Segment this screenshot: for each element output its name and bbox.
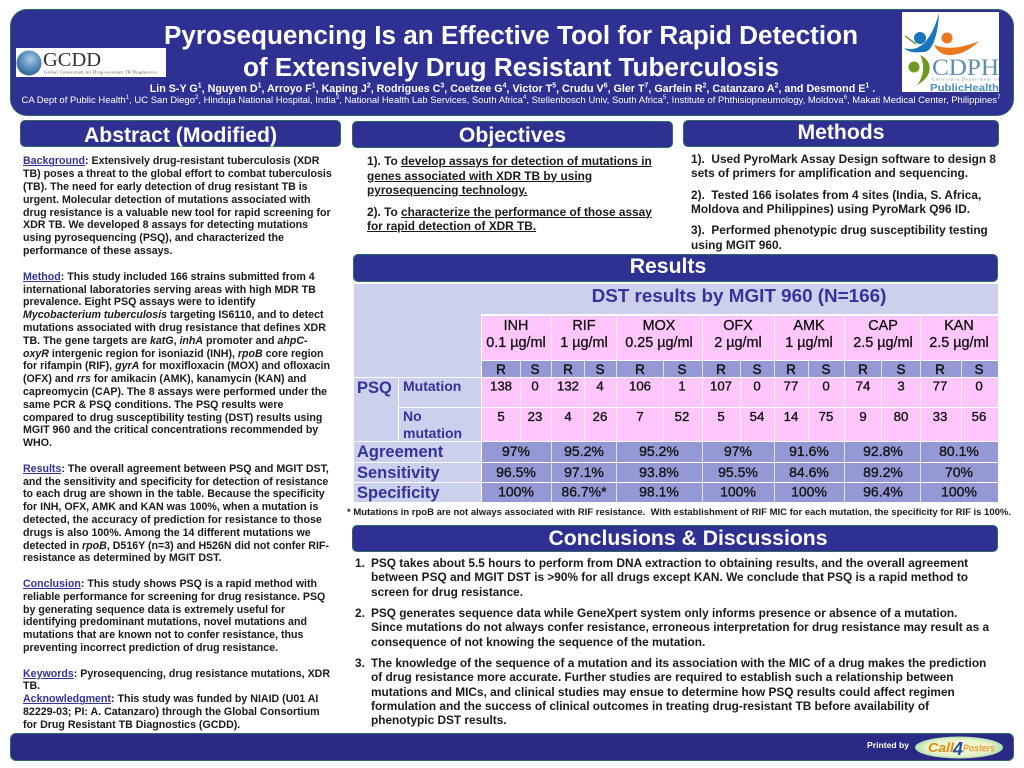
logo: printer: Posters — [963, 742, 995, 754]
method 1: sets of primers for amplification and sequencing. — [691, 166, 968, 180]
abstract: method: (OFX) and rrs for amikacin (AMK), kanamycin (KAN) and — [23, 373, 306, 385]
drug column headers — [486, 318, 989, 351]
drug column headers: AMK — [793, 318, 825, 334]
mutation row values: 0 — [975, 378, 983, 394]
conclusion 2: PSQ generates sequence data while GeneXpert system only informs presence or absence of a mutation. — [371, 606, 957, 620]
agreement values — [502, 443, 979, 459]
drug column headers: MOX — [643, 318, 676, 334]
heading: methods: Methods — [797, 121, 885, 144]
conclusion 3: 3. — [355, 656, 365, 670]
row labels: mutation — [403, 425, 462, 441]
drug column headers: 0.25 µg/ml — [625, 335, 693, 351]
heading: results: Results — [630, 255, 706, 278]
abstract: results: resistance as determined by MGIT DST. — [23, 552, 221, 564]
no mutation row values: 33 — [933, 409, 947, 424]
no mutation row values: 54 — [750, 409, 764, 424]
method 1: 1). Used PyroMark Assay Design software to design 8 — [691, 152, 996, 166]
abstract: method: mutations associated with drug resistance that defines XDR — [23, 322, 326, 334]
conclusion 1: PSQ takes about 5.5 hours to perform from DNA extraction to obtaining results, and the overall agreement — [371, 556, 968, 570]
title: of Extensively Drug Resistant Tuberculosis — [243, 52, 779, 82]
heading: results — [353, 254, 998, 282]
abstract: results: detected in rpoB, D516Y (n=3) and H526N did not confer RIF- — [23, 540, 329, 552]
conclusion 2: consequence of not knowing the sequence of the mutation. — [371, 634, 705, 648]
drug column headers: 2.5 µg/ml — [929, 335, 989, 351]
abstract: method: MGIT 960 and the critical concentrations recommended by — [23, 424, 318, 436]
no mutation row values: 7 — [636, 409, 644, 424]
heading: methods — [683, 120, 999, 147]
drug column headers: OFX — [723, 318, 753, 334]
logo: CDPH: California Department of — [932, 76, 999, 82]
drug column headers: 1 µg/ml — [560, 335, 608, 351]
sensitivity values: 95.5% — [718, 464, 758, 480]
no mutation row values: 56 — [972, 409, 986, 424]
abstract: results: for INH, OFX, AMK and KAN was 100%, when a mutation is — [23, 501, 318, 513]
abstract: background: performance of these assays. — [23, 245, 172, 257]
no mutation row values: 80 — [894, 409, 908, 424]
abstract: background: (TB). The need for early detection of drug resistant TB is — [23, 181, 308, 193]
panel: methods text — [691, 152, 996, 252]
specificity values: 100% — [941, 484, 977, 500]
mutation row values: 1 — [678, 378, 686, 394]
conclusion 3: The knowledge of the sequence of a mutation and its association with the MIC of a drug makes the prediction — [371, 656, 986, 670]
conclusion 3 — [355, 656, 986, 727]
conclusion 1: between PSQ and MGIT DST is >90% for all drugs except KAN. We conclude that PSQ is a rapid method to — [371, 570, 968, 584]
abstract: background — [23, 155, 332, 257]
no mutation row values: 5 — [497, 409, 505, 424]
sensitivity values: 89.2% — [863, 464, 903, 480]
drug column headers: CAP — [868, 318, 898, 334]
mutation row values: 106 — [629, 378, 651, 394]
header banner — [10, 9, 1014, 116]
mutation row values: 74 — [856, 378, 870, 394]
objective 1: genes associated with XDR TB by using — [367, 168, 592, 182]
R and S sub-headers: S — [595, 362, 605, 377]
mutation row values: 138 — [490, 378, 512, 394]
heading: objectives: Objectives — [459, 124, 566, 147]
R and S sub-headers: R — [858, 362, 868, 377]
abstract: keywords and acknowledgment: for Drug Resistant TB Diagnostics (GCDD). — [23, 719, 240, 731]
abstract: keywords and acknowledgment: Keywords: Pyrosequencing, drug resistance mutations, XDR — [23, 668, 330, 680]
abstract: background: drug resistance is a valuable new tool for rapid screening for — [23, 207, 331, 219]
abstract: keywords and acknowledgment: TB. — [23, 680, 40, 692]
specificity values: 98.1% — [639, 484, 679, 500]
drug column headers: 2 µg/ml — [714, 335, 762, 351]
R and S sub-headers — [496, 362, 984, 377]
R and S sub-headers: S — [974, 362, 984, 377]
abstract: keywords and acknowledgment: 82229-03; PI: A. Catanzaro) through the Global Consortium — [23, 706, 320, 718]
no mutation row values — [497, 409, 986, 424]
panel: abstract text — [23, 155, 332, 731]
row labels: No — [403, 408, 422, 424]
abstract: results: detected, the accuracy of prediction for resistance to those — [23, 514, 322, 526]
footer banner — [10, 733, 1014, 761]
abstract: method: capreomycin (CAP). The 8 assays were performed under the — [23, 386, 327, 398]
drug column headers: KAN — [944, 318, 974, 334]
abstract: results: Results: The overall agreement between PSQ and MGIT DST, — [23, 463, 329, 475]
logo: CDPH: CDPH — [932, 55, 999, 80]
authors: Lin S-Y G1, Nguyen D1, Arroyo F1, Kaping J2, Rodrigues C3, Coetzee G4, Victor T5, Crudu V6, Gler T7, Garfein R2, Catanzaro A2, and Desmond E1 . — [150, 82, 875, 95]
heading: conclusions — [352, 525, 998, 552]
specificity values: 100% — [791, 484, 827, 500]
R and S sub-headers: R — [786, 362, 796, 377]
results table — [354, 284, 998, 502]
mutation row values: 0 — [753, 378, 761, 394]
R and S sub-headers: S — [821, 362, 831, 377]
mutation row values: 4 — [596, 378, 604, 394]
agreement values: 92.8% — [863, 443, 903, 459]
no mutation row values: 75 — [819, 409, 833, 424]
conclusion 1 — [355, 556, 968, 598]
logo: GCDD: GCDD — [43, 49, 101, 71]
objective 1: 1). To develop assays for detection of mutations in — [367, 154, 652, 168]
mutation row values: 132 — [557, 378, 579, 394]
objective 2: for rapid detection of XDR TB. — [367, 219, 536, 233]
mutation row values: 3 — [897, 378, 905, 394]
abstract: conclusion: Conclusion: This study shows PSQ is a rapid method with — [23, 578, 317, 590]
abstract: method: Method: This study included 166 strains submitted from 4 — [23, 271, 315, 283]
abstract: results: and the sensitivity and specificity for detection of resistance — [23, 476, 328, 488]
mutation row values: 0 — [531, 378, 539, 394]
specificity values: 96.4% — [863, 484, 903, 500]
title: Pyrosequencing Is an Effective Tool for Rapid Detection — [164, 20, 858, 50]
method 3 — [691, 223, 988, 252]
abstract: method: Mycobacterium tuberculosis targeting IS6110, and to detect — [23, 309, 324, 321]
mutation row values: 107 — [710, 378, 732, 394]
abstract: results — [23, 463, 329, 564]
row labels: PSQ — [357, 379, 392, 397]
R and S sub-headers: S — [896, 362, 906, 377]
abstract: results: to each drug are shown in the table. Because the specificity — [23, 488, 325, 500]
affiliations: CA Dept of Public Health1, UC San Diego2, Hinduja National Hospital, India3, National Health Lab Services, South Africa4, Stellenbosch Univ, South Africa5, Institute of Phthisiopneumology, Moldova6, Makati Medical Center, Philippines7 — [22, 94, 1000, 106]
no mutation row values: 26 — [593, 409, 607, 424]
abstract: keywords and acknowledgment: Acknowledgment: This study was funded by NIAID (U01 AI — [23, 693, 318, 705]
objective 1 — [367, 154, 652, 197]
R and S sub-headers: S — [752, 362, 762, 377]
method 1 — [691, 152, 996, 180]
drug column headers: 1 µg/ml — [785, 335, 833, 351]
abstract: method: same PCR & PSQ conditions. The PSQ results were — [23, 399, 283, 411]
abstract: method — [23, 271, 330, 449]
abstract: background: using pyrosequencing (PSQ), and characterized the — [23, 232, 284, 244]
specificity values — [498, 484, 977, 500]
method 3: using MGIT 960. — [691, 238, 782, 252]
R and S sub-headers: S — [530, 362, 540, 377]
abstract: background: urgent. Molecular detection of mutations associated with — [23, 194, 311, 206]
no mutation row values: 52 — [675, 409, 689, 424]
sensitivity values: 96.5% — [496, 464, 536, 480]
sensitivity values — [496, 464, 973, 480]
abstract: background: Background: Extensively drug-resistant tuberculosis (XDR — [23, 155, 319, 167]
title — [164, 20, 858, 82]
no mutation row values: 14 — [784, 409, 798, 424]
sensitivity values: 97.1% — [564, 464, 604, 480]
mutation row values: 77 — [784, 378, 798, 394]
abstract: method: TB. The gene targets are katG, inhA promoter and ahpC- — [23, 335, 308, 347]
sensitivity values: 84.6% — [789, 464, 829, 480]
drug column headers: INH — [504, 318, 528, 334]
drug column headers: RIF — [572, 318, 596, 334]
abstract: method: WHO. — [23, 437, 52, 449]
abstract: method: for rifampin (RIF), gyrA for moxifloxacin (MOX) and ofloxacin — [23, 360, 330, 372]
specificity values: 100% — [720, 484, 756, 500]
specificity values: 86.7%* — [561, 484, 607, 500]
abstract: conclusion — [23, 578, 325, 654]
method 2 — [691, 188, 981, 216]
logo: printer — [915, 736, 1003, 759]
R and S sub-headers: R — [563, 362, 573, 377]
printed by label: Printed by — [867, 740, 909, 750]
agreement values: 91.6% — [789, 443, 829, 459]
no mutation row values: 4 — [564, 409, 572, 424]
conclusion 2: 2. — [355, 606, 365, 620]
abstract: method: prevalence. Eight PSQ assays were to identify — [23, 296, 256, 308]
conclusion 1: screen for drug resistance. — [371, 584, 523, 598]
no mutation row values: 5 — [717, 409, 725, 424]
row labels: Sensitivity — [357, 464, 440, 482]
abstract: background: XDR TB. We developed 8 assays for detecting mutations — [23, 219, 308, 231]
row labels: Agreement — [357, 443, 444, 461]
no mutation row values: 9 — [859, 409, 867, 424]
mutation row values — [490, 378, 983, 394]
method 2: Moldova and Philippines) using PyroMark Q96 ID. — [691, 202, 970, 216]
abstract: keywords and acknowledgment — [23, 668, 330, 731]
abstract: background: TB) poses a threat to the global effort to combat tuberculosis — [23, 168, 332, 180]
mutation row values: 0 — [822, 378, 830, 394]
drug column headers: 0.1 µg/ml — [486, 335, 546, 351]
conclusion 3: phenotypic DST results. — [371, 713, 507, 727]
conclusion 3: mutations and MICs, and clinical studies may ensue to determine how PSQ results could affect regimen — [371, 684, 955, 698]
abstract: conclusion: identifying predominant mutations, novel mutations and — [23, 616, 307, 628]
abstract: conclusion: reliable performance for screening for drug resistance. PSQ — [23, 591, 325, 603]
drug column headers: 2.5 µg/ml — [853, 335, 913, 351]
specificity values: 100% — [498, 484, 534, 500]
logo: CDPH — [902, 12, 999, 92]
abstract: method: international laboratories serving areas with high MDR TB — [23, 284, 316, 296]
row labels: Mutation — [403, 378, 461, 394]
sensitivity values: 70% — [945, 464, 973, 480]
objective 2: 2). To characterize the performance of those assay — [367, 204, 652, 218]
logo: printer: 4 — [952, 739, 963, 759]
objective 1: pyrosequencing technology. — [367, 183, 527, 197]
objective 2 — [367, 204, 652, 233]
panel: conclusions text — [355, 556, 990, 727]
conclusion 3: formulation and the success of clinical outcomes in treating drug-resistant TB before availability of — [371, 699, 929, 713]
heading: abstract: Abstract (Modified) — [84, 124, 277, 147]
R and S sub-headers: R — [716, 362, 726, 377]
agreement values: 80.1% — [939, 443, 979, 459]
R and S sub-headers: S — [677, 362, 687, 377]
R and S sub-headers: R — [635, 362, 645, 377]
logo: GCDD: Global Consortium for Drug-resistant TB Diagnostics — [44, 70, 157, 74]
heading: conclusions: Conclusions & Discussions — [548, 527, 828, 550]
agreement values: 97% — [724, 443, 752, 459]
logo: GCDD — [16, 48, 166, 77]
conclusion 2 — [355, 606, 990, 648]
conclusion 3: of drug resistance more accurate. Further studies are required to establish such a relationship between — [371, 670, 953, 684]
table title: DST results by MGIT 960 (N=166) — [592, 285, 886, 306]
agreement values: 97% — [502, 443, 530, 459]
table footnote: * Mutations in rpoB are not always associated with RIF resistance. With establishment of RIF MIC for each mutation, the specificity for RIF is 100%. — [347, 507, 1011, 518]
abstract: conclusion: by generating sequence data is extremely useful for — [23, 604, 285, 616]
abstract: conclusion: mutations that are known not to confer resistance, thus — [23, 629, 303, 641]
R and S sub-headers: R — [935, 362, 945, 377]
no mutation row values: 23 — [528, 409, 542, 424]
heading: objectives — [352, 121, 673, 148]
method 3: 3). Performed phenotypic drug susceptibility testing — [691, 223, 988, 237]
R and S sub-headers: R — [496, 362, 506, 377]
heading: abstract — [20, 120, 341, 147]
abstract: conclusion: preventing incorrect prediction of drug resistance. — [23, 642, 278, 654]
abstract: results: drugs is also 100%. Among the 14 different mutations we — [23, 527, 311, 539]
abstract: method: oxyR intergenic region for isoniazid (INH), rpoB core region — [23, 348, 324, 360]
conclusion 1: 1. — [355, 556, 365, 570]
agreement values: 95.2% — [639, 443, 679, 459]
logo: printer: Call — [928, 741, 955, 755]
conclusion 2: Since mutations do not always confer resistance, erroneous interpretation for drug resistance may result as a — [371, 620, 989, 634]
method 2: 2). Tested 166 isolates from 4 sites (India, S. Africa, — [691, 188, 981, 202]
mutation row values: 77 — [933, 378, 947, 394]
panel: objectives text — [367, 154, 652, 233]
sensitivity values: 93.8% — [639, 464, 679, 480]
row labels — [357, 378, 462, 502]
agreement values: 95.2% — [564, 443, 604, 459]
abstract: method: compared to drug susceptibility testing (DST) results using — [23, 412, 322, 424]
row labels: Specificity — [357, 484, 440, 502]
